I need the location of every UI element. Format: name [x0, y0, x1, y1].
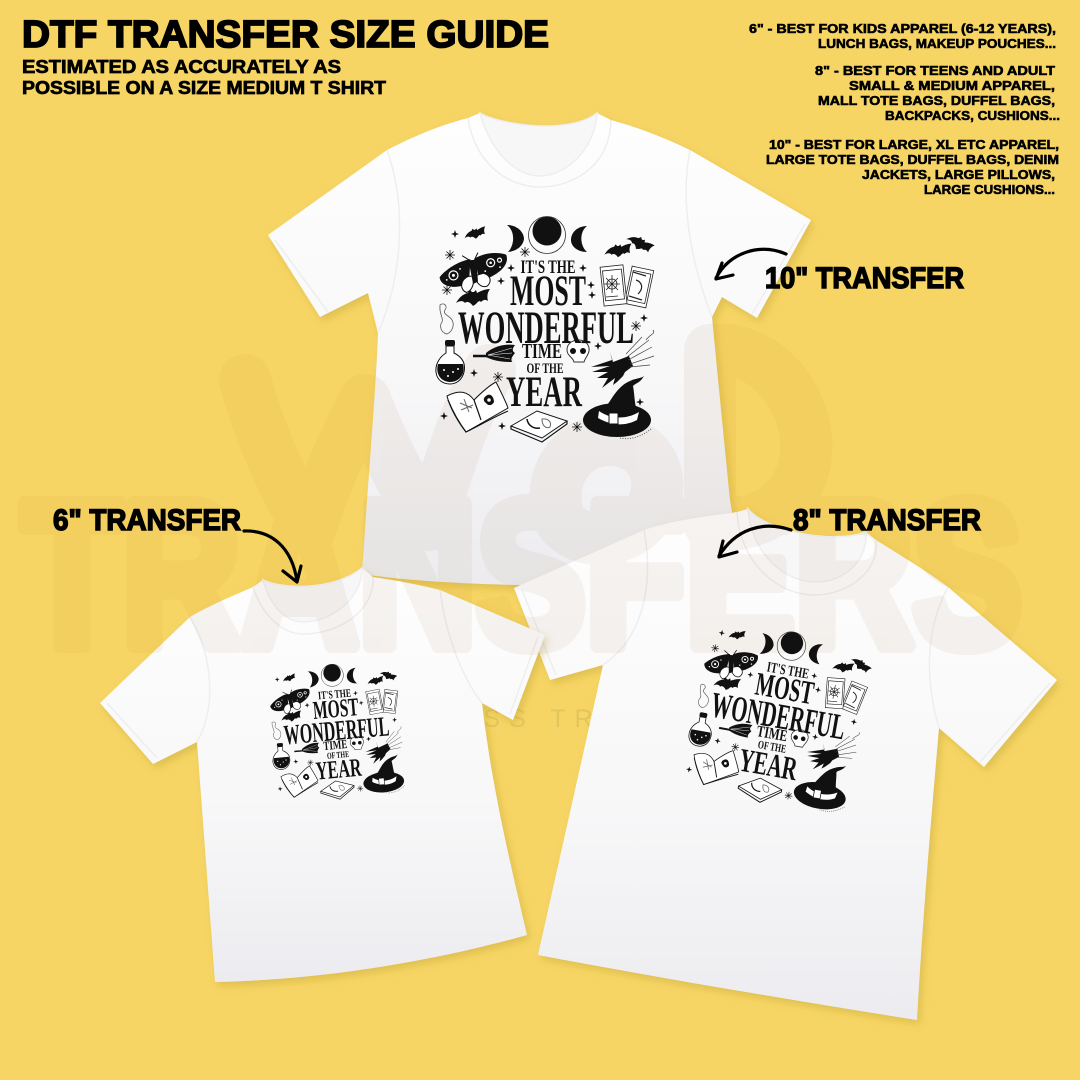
closed book — [511, 411, 567, 442]
usage notes: LARGE TOTE BAGS, DUFFEL BAGS, DENIM — [766, 152, 1059, 167]
open book — [447, 382, 508, 432]
moth — [268, 687, 312, 716]
usage notes: LARGE CUSHIONS... — [924, 182, 1055, 197]
skull — [567, 340, 589, 362]
design: medium print — [679, 617, 876, 817]
small t-shirt: 6 inch — [100, 568, 545, 982]
broom — [718, 719, 752, 738]
slogan: MOST — [312, 692, 360, 725]
subtitle — [22, 57, 386, 98]
subtitle: POSSIBLE ON A SIZE MEDIUM T SHIRT — [22, 78, 386, 98]
slogan: OF THE — [757, 739, 787, 756]
usage notes: JACKETS, LARGE PILLOWS, — [862, 167, 1055, 182]
usage notes: SMALL & MEDIUM APPAREL, — [849, 78, 1055, 93]
moon phases — [507, 216, 587, 254]
slogan: WONDERFUL — [708, 685, 849, 747]
potion — [687, 683, 720, 748]
stars — [268, 667, 403, 799]
slogan: YEAR — [736, 742, 801, 788]
stars — [684, 628, 869, 809]
witch hand — [804, 724, 860, 776]
usage notes: LUNCH BAGS, MAKEUP POUCHES... — [818, 36, 1056, 51]
usage notes: 6" - BEST FOR KIDS APPAREL (6-12 YEARS), — [749, 21, 1056, 36]
arrow: 6 inch — [244, 531, 301, 582]
broom — [294, 743, 320, 755]
bats — [277, 664, 400, 722]
slogan: TIME — [323, 737, 348, 753]
watermark: press transfers: PRESS TRANSFERS — [405, 705, 783, 733]
slogan: YEAR — [506, 369, 583, 416]
label: 10 inch: 10" TRANSFER — [765, 262, 964, 295]
design: small print — [265, 659, 408, 805]
arrow: 10 inch — [716, 249, 786, 279]
slogan: OF THE — [327, 749, 349, 761]
closed book — [320, 779, 355, 801]
large t-shirt: 10 inch — [268, 113, 811, 586]
arrow: 8 inch — [719, 526, 791, 557]
slogan: WONDERFUL — [283, 711, 390, 751]
witch hand — [591, 330, 654, 388]
broom — [473, 345, 515, 362]
slogan: TIME — [522, 339, 562, 363]
stars — [440, 230, 648, 432]
slogan: IT'S THE — [318, 688, 352, 702]
slogan — [458, 257, 634, 416]
label: 8 inch: 8" TRANSFER — [793, 504, 981, 537]
open book — [689, 744, 742, 790]
moon phases — [307, 662, 357, 688]
moth — [438, 251, 509, 294]
usage notes — [749, 21, 1060, 197]
title: DTF TRANSFER SIZE GUIDE — [22, 14, 549, 56]
open book — [280, 765, 319, 798]
usage notes: 8" - BEST FOR TEENS AND ADULT — [815, 63, 1055, 78]
usage notes: BACKPACKS, CUSHIONS... — [885, 108, 1060, 123]
witch hat — [361, 754, 406, 795]
potion — [269, 721, 291, 770]
tarot cards — [600, 265, 654, 308]
subtitle: ESTIMATED AS ACCURATELY AS — [22, 57, 341, 77]
slogan — [280, 684, 394, 788]
tarot cards — [366, 688, 400, 716]
watermark over shirts — [153, 324, 1010, 655]
slogan: OF THE — [526, 361, 564, 377]
usage notes: MALL TOTE BAGS, DUFFEL BAGS, — [818, 93, 1055, 108]
slogan: TIME — [755, 723, 789, 745]
moon phases — [759, 627, 824, 665]
slogan: MOST — [753, 666, 817, 712]
label: 6 inch: 6" TRANSFER — [53, 504, 241, 537]
bats — [713, 627, 874, 714]
witch hat — [792, 758, 852, 814]
tarot cards — [822, 676, 868, 716]
skull — [790, 728, 809, 748]
slogan: MOST — [510, 268, 586, 315]
medium t-shirt: 8 inch — [514, 509, 1057, 1020]
closed book — [736, 775, 783, 806]
slogan: IT'S THE — [520, 257, 576, 278]
potion — [436, 304, 465, 384]
watermark on background — [22, 350, 1022, 689]
usage notes: 10" - BEST FOR LARGE, XL ETC APPAREL, — [769, 137, 1059, 152]
slogan — [700, 651, 854, 795]
witch hand — [364, 726, 404, 764]
slogan: WONDERFUL — [458, 302, 634, 354]
moth — [703, 647, 759, 682]
design: large print — [436, 216, 655, 442]
bats — [456, 226, 655, 306]
slogan: YEAR — [315, 753, 363, 786]
witch hat — [583, 376, 652, 439]
slogan: IT'S THE — [766, 659, 810, 683]
skull — [350, 736, 364, 750]
